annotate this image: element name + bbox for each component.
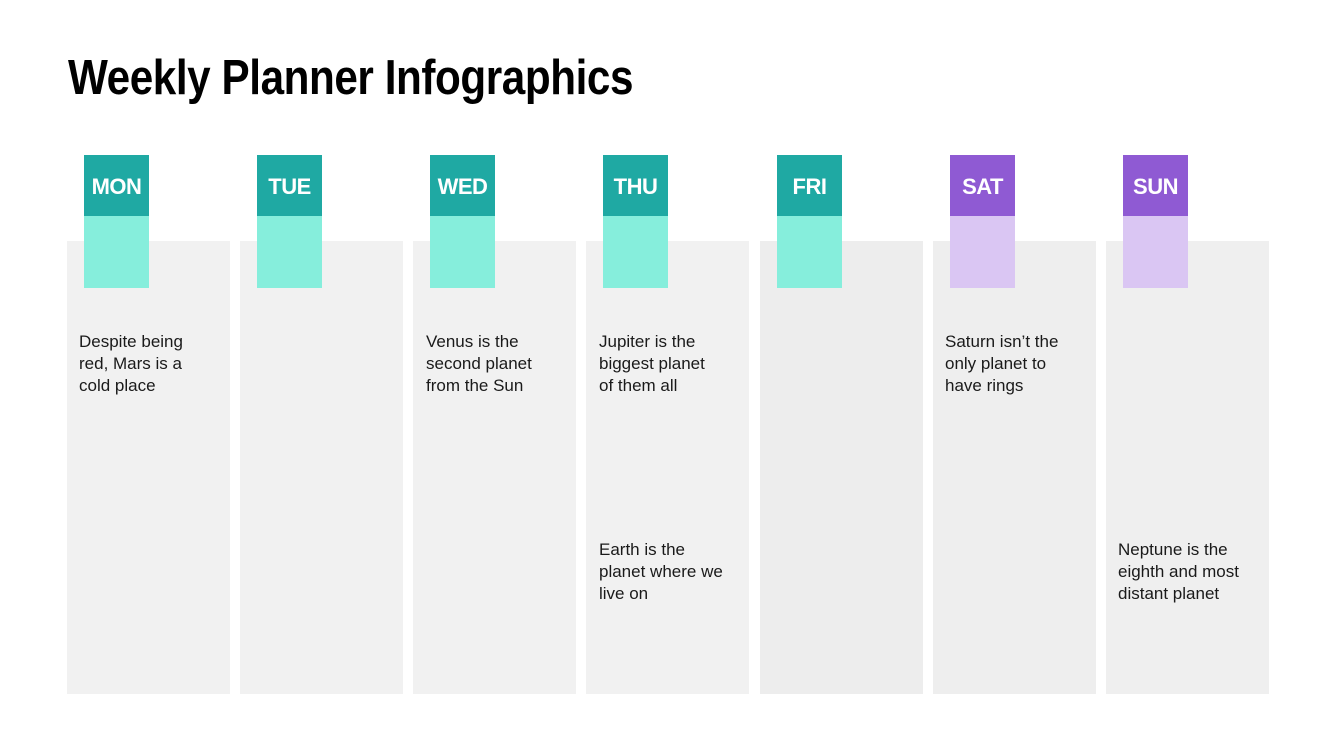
tab: WED: WED [438, 174, 487, 199]
text: sunday: Neptune is the [1118, 540, 1228, 559]
text: thursday 2 [599, 540, 723, 603]
tab: FRI [777, 155, 842, 288]
tab: MON [84, 155, 149, 288]
text: thursday 1: of them all [599, 376, 677, 395]
text: thursday 1: biggest planet [599, 354, 705, 373]
tab: SAT [950, 155, 1015, 288]
panel: thursday [586, 241, 749, 694]
tab: SAT: SAT [962, 174, 1003, 199]
text: saturday [945, 332, 1058, 395]
text: saturday: only planet to [945, 354, 1046, 373]
text: thursday 2: live on [599, 584, 648, 603]
tab: TUE: TUE [268, 174, 311, 199]
tab: TUE [257, 155, 322, 288]
text: thursday 2: planet where we [599, 562, 723, 581]
text: monday: cold place [79, 376, 156, 395]
panel: tuesday [240, 241, 403, 694]
title: Weekly Planner Infographics [68, 51, 633, 105]
text: thursday 1 [599, 332, 705, 395]
tab: SUN: SUN [1133, 174, 1178, 199]
text: sunday [1118, 540, 1239, 603]
text: sunday: distant planet [1118, 584, 1219, 603]
text: wednesday [426, 332, 532, 395]
text: monday: red, Mars is a [79, 354, 182, 373]
panel: wednesday [413, 241, 576, 694]
text: saturday: have rings [945, 376, 1023, 395]
text: sunday: eighth and most [1118, 562, 1239, 581]
panel: saturday [933, 241, 1096, 694]
text: thursday 2: Earth is the [599, 540, 685, 559]
panel: friday [760, 241, 923, 694]
text: monday [79, 332, 183, 395]
panel: monday [67, 241, 230, 694]
tab: WED [430, 155, 495, 288]
text: monday: Despite being [79, 332, 183, 351]
text: wednesday: Venus is the [426, 332, 519, 351]
panel: sunday [1106, 241, 1269, 694]
text: wednesday: from the Sun [426, 376, 523, 395]
text: thursday 1: Jupiter is the [599, 332, 695, 351]
tab: THU [603, 155, 668, 288]
tab: MON: MON [92, 174, 141, 199]
text: saturday: Saturn isn’t the [945, 332, 1058, 351]
tab: SUN [1123, 155, 1188, 288]
tab: THU: THU [614, 174, 657, 199]
text: wednesday: second planet [426, 354, 532, 373]
tab: FRI: FRI [793, 174, 826, 199]
